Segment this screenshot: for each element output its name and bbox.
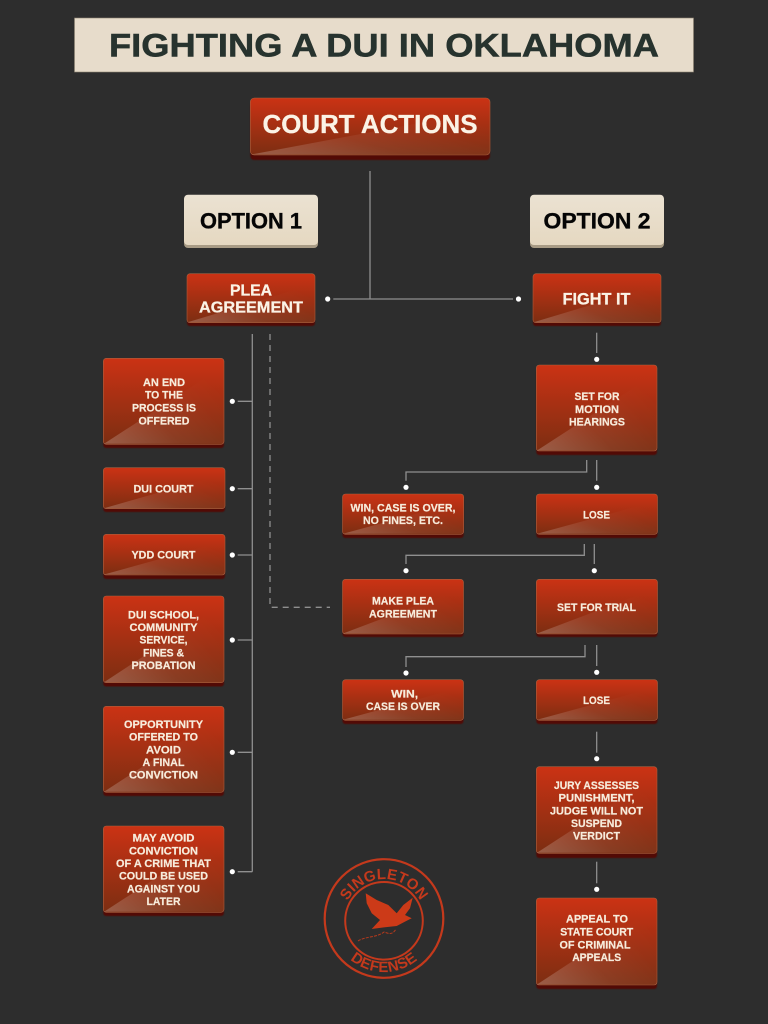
logo: singleton defense seal: SINGLETON bbox=[340, 868, 428, 900]
box: opportunity to avoid final conviction: OPPORTUNITY bbox=[124, 719, 203, 731]
box: option 1: OPTION 1 bbox=[200, 208, 302, 234]
box: option 2: OPTION 2 bbox=[544, 208, 650, 234]
box: opportunity to avoid final conviction: AVOID bbox=[146, 744, 181, 756]
box: lose (trial) bbox=[536, 680, 658, 724]
box: fight it: FIGHT IT bbox=[562, 290, 631, 308]
connector: lose to jury bbox=[594, 732, 599, 761]
box: dui school: SERVICE, bbox=[140, 635, 188, 647]
box: appeal: STATE COURT bbox=[560, 926, 633, 938]
box: an end to the process: TO THE bbox=[145, 390, 183, 402]
box: make plea agreement bbox=[342, 579, 464, 637]
box: set for motion hearings: MOTION bbox=[575, 404, 619, 416]
box: an end to the process: AN END bbox=[143, 377, 185, 389]
box: dui court: DUI COURT bbox=[134, 484, 194, 496]
dashed connector: plea agreement to make plea agreement bbox=[270, 334, 330, 607]
connector: jury to appeal bbox=[594, 862, 599, 892]
box: may avoid conviction bbox=[103, 826, 224, 916]
box: win, case is over, no fines bbox=[342, 494, 464, 538]
box: may avoid conviction: COULD BE USED bbox=[119, 871, 208, 883]
box: appeal: APPEALS bbox=[572, 952, 622, 964]
box: make plea agreement: MAKE PLEA bbox=[372, 596, 434, 608]
box: set for motion hearings: HEARINGS bbox=[569, 416, 625, 428]
box: may avoid conviction: OF A CRIME THAT bbox=[116, 858, 211, 870]
connector: motion hearings branches bbox=[403, 460, 599, 490]
box: jury assesses punishment: JUDGE WILL NOT bbox=[550, 805, 643, 817]
box: jury assesses punishment: PUNISHMENT, bbox=[558, 793, 634, 805]
box: fight it bbox=[533, 274, 661, 326]
box: set for motion hearings bbox=[536, 365, 657, 455]
box: jury assesses punishment bbox=[536, 767, 657, 858]
box: dui school: PROBATION bbox=[132, 660, 196, 672]
box: an end to the process: OFFERED bbox=[138, 415, 190, 427]
box: option 1 bbox=[184, 195, 318, 248]
box: win, case is over: CASE IS OVER bbox=[366, 701, 440, 713]
box: dui school: FINES & bbox=[143, 647, 184, 659]
box: opportunity to avoid final conviction: A FINAL bbox=[142, 757, 185, 769]
box: dui school: COMMUNITY bbox=[130, 622, 198, 634]
box: plea agreement bbox=[187, 274, 315, 326]
box: opportunity to avoid final conviction: OFFERED TO bbox=[129, 732, 198, 744]
box: lose (motion hearings) bbox=[536, 494, 658, 538]
connector: option 1 outcomes bbox=[230, 334, 252, 874]
logo: singleton defense seal bbox=[324, 858, 444, 979]
box: win, case is over: WIN, bbox=[391, 688, 418, 700]
box: court actions bbox=[250, 98, 490, 160]
box: lose (motion hearings): LOSE bbox=[583, 510, 610, 522]
box: make plea agreement: AGREEMENT bbox=[369, 608, 437, 620]
box: win, case is over bbox=[342, 680, 464, 724]
title banner bbox=[74, 18, 694, 72]
box: appeal: OF CRIMINAL bbox=[560, 939, 631, 951]
box: option 2 bbox=[530, 195, 664, 248]
box: dui school bbox=[103, 596, 224, 686]
box: dui school: DUI SCHOOL, bbox=[128, 609, 199, 621]
logo: singleton defense seal: DEFENSE bbox=[350, 952, 418, 972]
box: jury assesses punishment: VERDICT bbox=[573, 831, 620, 843]
connector: lose branches bbox=[403, 544, 597, 573]
box: set for trial: SET FOR TRIAL bbox=[557, 602, 636, 614]
title banner: FIGHTING A DUI IN OKLAHOMA bbox=[109, 28, 659, 64]
box: may avoid conviction: CONVICTION bbox=[129, 845, 198, 857]
box: may avoid conviction: LATER bbox=[146, 896, 180, 908]
box: an end to the process bbox=[103, 358, 224, 448]
box: dui court bbox=[103, 468, 225, 512]
box: appeal: APPEAL TO bbox=[566, 914, 628, 926]
box: ydd court bbox=[103, 534, 225, 579]
box: opportunity to avoid final conviction: CONVICTION bbox=[129, 770, 198, 782]
connector: trial branches bbox=[403, 645, 599, 676]
box: appeal bbox=[536, 898, 657, 989]
box: may avoid conviction: MAY AVOID bbox=[132, 833, 194, 845]
box: win, case is over, no fines: WIN, CASE IS OVER, bbox=[350, 502, 456, 514]
box: opportunity to avoid final conviction bbox=[103, 706, 224, 796]
box: jury assesses punishment: JURY ASSESSES bbox=[554, 780, 639, 792]
box: set for trial bbox=[536, 579, 658, 637]
icon: bird bbox=[366, 893, 413, 929]
box: plea agreement: PLEA bbox=[230, 282, 272, 300]
box: plea agreement: AGREEMENT bbox=[199, 300, 303, 316]
connector: court actions to options bbox=[325, 171, 521, 302]
box: an end to the process: PROCESS IS bbox=[132, 403, 196, 415]
box: lose (trial): LOSE bbox=[583, 695, 610, 707]
box: win, case is over, no fines: NO FINES, ETC. bbox=[363, 515, 443, 527]
connector: fight it to motion hearings bbox=[594, 333, 599, 362]
box: set for motion hearings: SET FOR bbox=[574, 391, 620, 403]
box: court actions: COURT ACTIONS bbox=[262, 109, 478, 139]
box: jury assesses punishment: SUSPEND bbox=[571, 818, 622, 830]
box: ydd court: YDD COURT bbox=[132, 550, 196, 562]
box: may avoid conviction: AGAINST YOU bbox=[127, 883, 200, 895]
